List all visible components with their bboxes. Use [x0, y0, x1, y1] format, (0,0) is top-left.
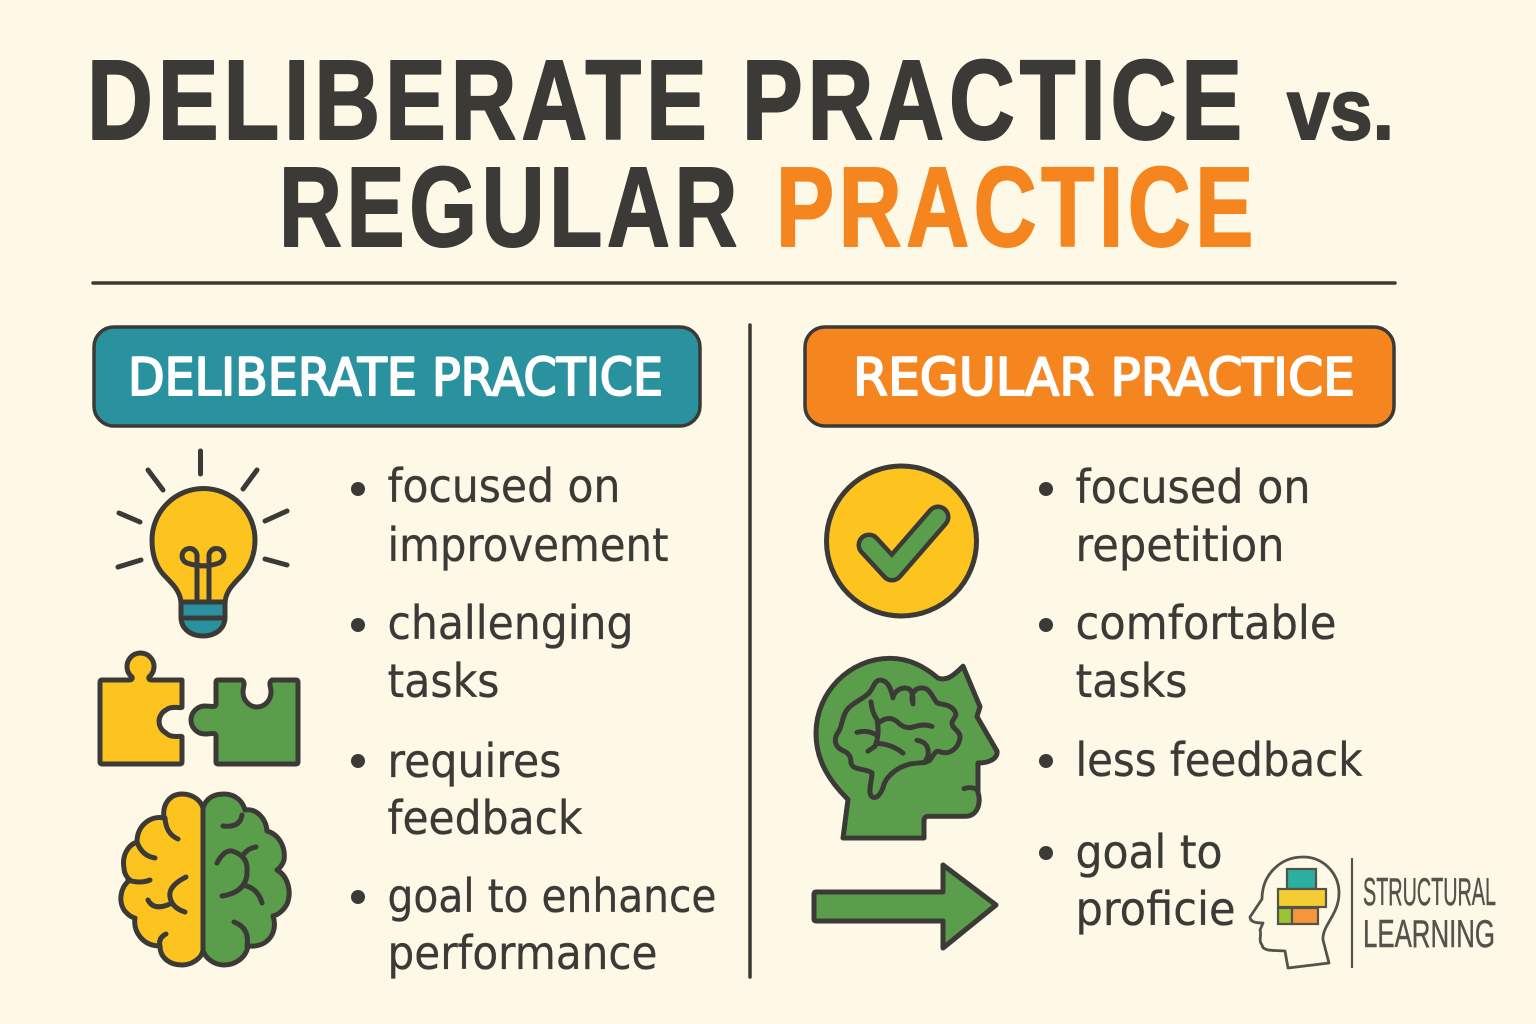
- bullet list: regular practice: repetition: [1076, 518, 1284, 572]
- bullet list: deliberate practice: challenging: [388, 596, 634, 650]
- title: DELIBERATE PRACTICE: [87, 37, 1247, 163]
- bullet list: deliberate practice: performance: [388, 926, 658, 980]
- heading: regular practice: [805, 327, 1394, 426]
- panel: regular practice: [805, 327, 1394, 948]
- bullet list: regular practice: proficie: [1076, 882, 1236, 936]
- heading: deliberate practice: [94, 327, 700, 426]
- icon: light bulb: [118, 451, 287, 636]
- bullet list: regular practice: less feedback: [1076, 733, 1363, 787]
- title: REGULAR: [279, 144, 742, 270]
- bullet list: regular practice: comfortable: [1076, 596, 1336, 650]
- panel: deliberate practice: [94, 327, 716, 980]
- bullet list: regular practice: [1039, 460, 1363, 936]
- bullet list: deliberate practice: tasks: [388, 654, 500, 708]
- icon: two-colour brain: [121, 794, 289, 965]
- title: [87, 37, 1394, 270]
- icon: puzzle pieces: [100, 653, 298, 764]
- bullet list: deliberate practice: feedback: [388, 791, 583, 845]
- title: vs.: [1287, 62, 1394, 158]
- bullet list: deliberate practice: improvement: [388, 518, 668, 572]
- heading: deliberate practice: DELIBERATE PRACTICE: [128, 348, 663, 408]
- bullet list: deliberate practice: requires: [388, 734, 562, 788]
- bullet list: regular practice: tasks: [1076, 654, 1188, 708]
- bullet list: regular practice: focused on: [1076, 460, 1310, 514]
- logo: structural learning: [1250, 857, 1496, 968]
- bullet list: deliberate practice: [351, 459, 716, 980]
- title: PRACTICE: [776, 144, 1258, 270]
- icon: arrow: [814, 865, 996, 948]
- bullet list: deliberate practice: goal to enhance: [388, 869, 716, 923]
- icon: check mark circle: [826, 466, 976, 616]
- icon: head with brain: [816, 658, 997, 838]
- bullet list: deliberate practice: focused on: [388, 459, 620, 513]
- bullet list: regular practice: goal to: [1076, 825, 1222, 879]
- heading: regular practice: REGULAR PRACTICE: [853, 348, 1355, 408]
